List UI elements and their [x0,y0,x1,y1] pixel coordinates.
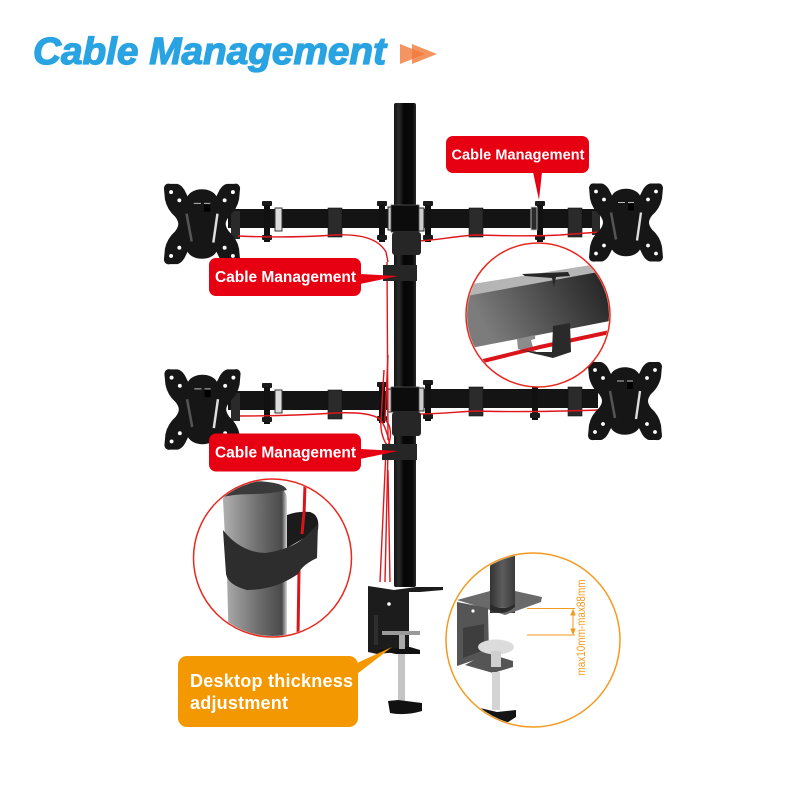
upper collar [391,205,421,255]
plate: upper left [164,184,240,264]
lower arm [228,379,598,424]
lower cable band [382,444,417,460]
dimension text: max10mm-max88mm [576,580,588,676]
panel: arm clip detail circle [466,243,615,387]
callout: cable management upper pole [209,258,398,296]
plate: lower right [588,362,662,440]
callout: desktop thickness adjustment: Desktop thickness [190,671,353,691]
panel: pole band detail circle [194,479,352,650]
lower collar [391,387,421,436]
callout: desktop thickness adjustment [178,647,392,727]
pole [394,103,416,587]
callout: cable management lower pole: Cable Management [215,444,356,462]
upper arm [228,201,600,242]
callout: cable management upper pole: Cable Management [215,269,356,286]
plate: lower left [164,369,241,450]
desk clamp [368,586,443,714]
red cables [238,232,600,582]
callout: cable management lower pole [209,434,398,472]
callout: desktop thickness adjustment: adjustment [190,693,288,713]
upper cable band [383,265,417,281]
title: Cable Management [33,31,387,73]
dimension lines [527,608,575,635]
icon: double arrow [400,44,437,64]
monitor arm product [164,103,663,714]
panel: desk clamp detail circle [446,553,620,727]
plate: upper right [589,183,663,262]
callout: cable management top right [446,136,589,200]
callout: cable management top right: Cable Management [452,148,585,164]
